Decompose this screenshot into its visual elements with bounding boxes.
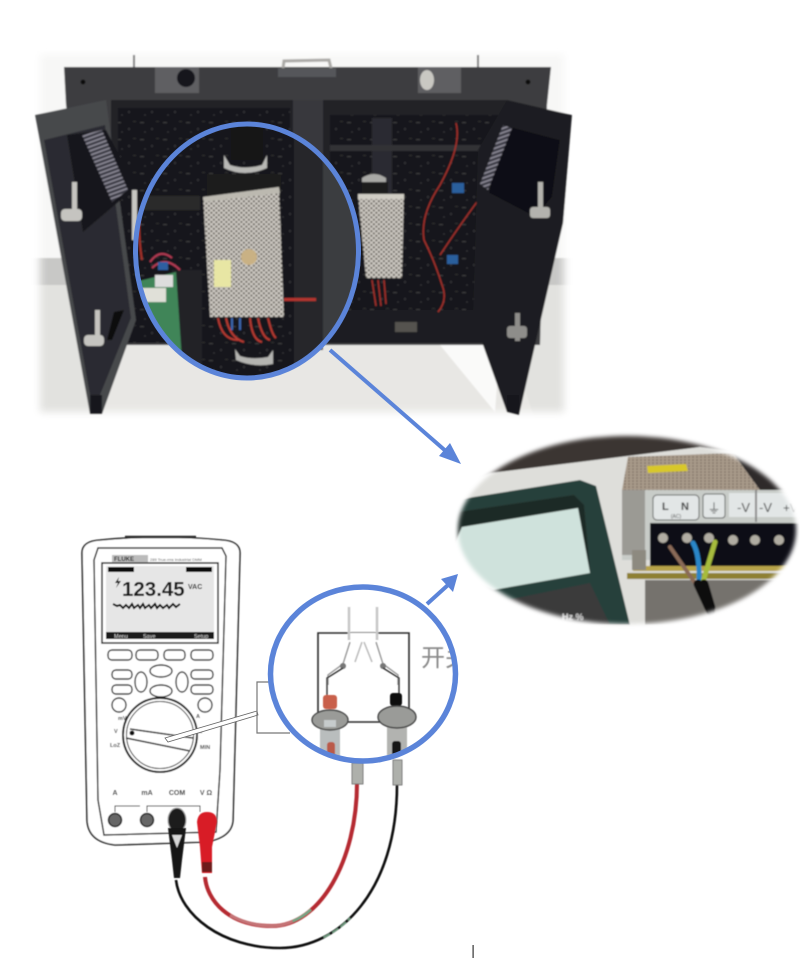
zoom circle around power supply <box>136 124 358 378</box>
meter mode labels: MIN <box>200 745 210 751</box>
red plug <box>197 812 217 873</box>
black lead <box>176 785 397 948</box>
arrow: zoom circle to terminal close-up <box>330 350 461 464</box>
multimeter <box>82 537 240 845</box>
meter mode labels: Ω <box>198 729 203 735</box>
door latch, upper <box>530 182 550 218</box>
jack labels: A <box>112 790 118 797</box>
highlighted power supply, inside zoom circle <box>138 127 356 376</box>
unit: VAC <box>188 584 202 591</box>
hazard bolt <box>115 577 121 588</box>
black probe <box>378 693 416 762</box>
left door <box>35 100 137 414</box>
softkey bar: Save <box>143 634 156 640</box>
terminal label ground: ⏚ <box>707 501 721 516</box>
terminal label ground <box>703 494 725 518</box>
jack labels <box>112 790 212 797</box>
meter mode labels: V <box>114 729 118 735</box>
terminal screws <box>658 533 784 545</box>
red probe <box>312 695 348 762</box>
test leads <box>168 760 402 948</box>
jack labels: COM <box>169 790 185 797</box>
terminal label L N AC <box>653 495 699 520</box>
mains wires <box>670 542 715 612</box>
terminal label L N AC: (AC) <box>671 514 681 520</box>
jack sockets <box>108 806 200 826</box>
meter mode labels: mV <box>118 716 127 722</box>
switch body <box>327 607 399 695</box>
door latch, lower <box>84 310 104 346</box>
jack labels: V Ω <box>200 790 212 797</box>
screen <box>102 555 218 643</box>
inset circle ring <box>270 587 456 761</box>
terminal labels V outputs: -V <box>759 500 772 515</box>
meter mode labels <box>110 714 210 751</box>
meter in close-up <box>450 480 630 625</box>
jack labels: mA <box>141 790 153 797</box>
inset circle: probes on terminals <box>270 587 469 762</box>
close-up photo: meter beside power supply terminals <box>450 430 800 630</box>
terminal labels V outputs: -V <box>737 500 750 515</box>
door latch, lower <box>507 313 527 341</box>
door latch, upper <box>61 182 82 221</box>
top plates, knobs and handle <box>80 55 530 93</box>
power supply in close-up <box>622 453 800 625</box>
softkey bar <box>106 632 214 640</box>
small stray tick at bottom <box>472 945 474 958</box>
meter key label: Hz % <box>562 612 584 622</box>
cabinet legs and base edge <box>90 395 519 415</box>
function keys <box>108 650 213 712</box>
dark background band <box>487 432 722 474</box>
meter mode labels: A <box>196 714 200 720</box>
terminal label L N AC: N <box>681 501 689 513</box>
selector pointer callout <box>165 682 290 742</box>
second power supply <box>358 123 490 312</box>
black plug <box>168 808 186 878</box>
cabinet body <box>64 55 551 350</box>
terminal label L N AC: L <box>662 501 669 513</box>
meter body outline <box>82 537 240 845</box>
terminal labels V outputs <box>729 493 800 517</box>
terminal labels V outputs: +V <box>783 501 798 515</box>
voltage reading: 123.45 <box>122 578 185 601</box>
softkey bar: Setup <box>194 634 208 640</box>
brand strip: FLUKE <box>114 557 134 563</box>
terminal wiring frame <box>318 633 409 722</box>
meter mode labels: LoZ <box>110 743 121 749</box>
brand strip: 289 True-rms Industrial DMM <box>150 557 202 562</box>
red lead <box>205 783 357 926</box>
softkey bar: Menu <box>114 634 128 640</box>
waveform <box>113 604 180 608</box>
probe sleeves <box>352 760 402 785</box>
arrow: inset circle to close-up photo <box>427 574 458 604</box>
switch label: 开关 <box>421 645 469 672</box>
photo background: wall and floor <box>30 50 575 425</box>
dial <box>123 698 197 772</box>
right door <box>473 100 572 415</box>
photo: LED display cabinet with open doors <box>30 50 575 425</box>
brand strip <box>112 555 202 563</box>
